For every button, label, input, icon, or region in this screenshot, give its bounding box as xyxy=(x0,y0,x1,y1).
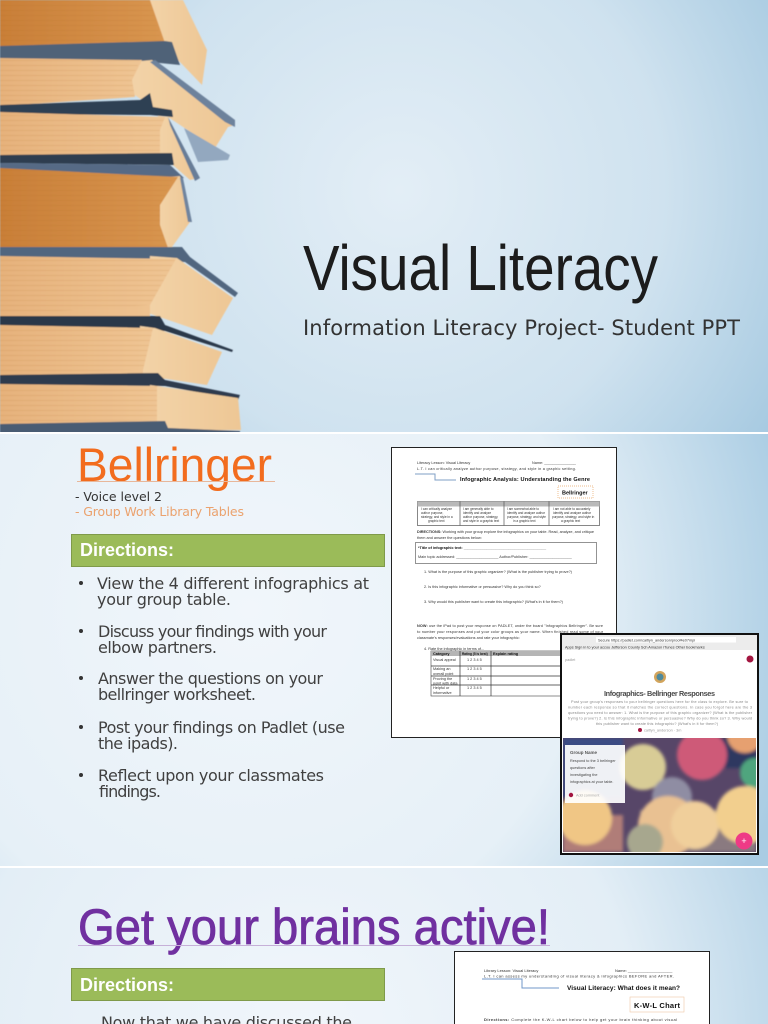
worksheet: infographic analysis: 1 2 3 4 5 xyxy=(467,658,482,662)
padlet note card: Add comment xyxy=(576,794,600,798)
image: stack of books xyxy=(0,0,241,433)
worksheet: infographic analysis xyxy=(392,448,616,738)
worksheet: infographic analysis: point with data xyxy=(433,682,458,686)
worksheet: infographic analysis: 1. What is the purpose of this graphic organizer? (What is the publisher trying to prove?) xyxy=(424,570,573,574)
subtitle: Information Literacy Project- Student PPT xyxy=(303,316,740,340)
worksheet: infographic analysis: purpose, strategy, and style xyxy=(507,515,546,519)
directions bar xyxy=(72,968,384,1000)
padlet description: questions you need to answer: 1. What is the purpose of this graphic organizer? (What is the publisher xyxy=(568,711,753,715)
directions bar xyxy=(72,534,384,566)
padlet note card: infographics at your table. xyxy=(570,780,613,784)
worksheet: infographic analysis: identify and analyze author xyxy=(553,511,592,515)
worksheet: infographic analysis: identify and analyze author xyxy=(507,511,546,515)
worksheet: infographic analysis: informative xyxy=(433,691,452,695)
worksheet: infographic analysis: NOW: use the iPad to post your response on PADLET, under the board "Infographics Bellringer". Be sure xyxy=(417,624,603,628)
worksheet: K-W-L chart: Library Lesson: Visual Literacy xyxy=(484,968,538,973)
list: directions bullets: Discuss your findings with your xyxy=(98,622,327,641)
worksheet: infographic analysis: L.T. I can critically analyze author purpose, strategy, and style in a graphic setting. xyxy=(417,467,576,471)
worksheet: infographic analysis: I am not able to accurately xyxy=(553,507,591,511)
title: Visual Literacy xyxy=(303,232,658,304)
list: directions bullets: your group table. xyxy=(97,590,231,609)
worksheet: infographic analysis: I am generally able to xyxy=(463,507,494,511)
worksheet: infographic analysis: Explain rating xyxy=(493,652,519,656)
padlet heading: Infographics- Bellringer Responses xyxy=(604,689,715,698)
screenshot: padlet board xyxy=(558,634,768,860)
padlet note card: questions after xyxy=(570,766,596,770)
directions bar: Directions: xyxy=(80,975,174,995)
worksheet: infographic analysis: 1 2 3 4 5 xyxy=(467,677,482,681)
list: directions bullets: View the 4 different infographics at xyxy=(97,574,369,593)
heading: Bellringer: Bellringer xyxy=(77,438,272,491)
worksheet: infographic analysis: in a graphic text xyxy=(513,519,536,523)
worksheet: infographic analysis: graphic text xyxy=(428,519,445,523)
worksheet: infographic analysis: Category xyxy=(433,652,450,656)
list: directions bullets: the ipads). xyxy=(98,734,178,753)
padlet note card xyxy=(565,745,625,803)
list: directions bullets: Post your findings on Padlet (use xyxy=(98,718,345,737)
padlet description: number each response so that it matches the correct questions. In case you forgot here are the 3 xyxy=(568,706,752,710)
add button: + xyxy=(741,836,747,846)
worksheet: infographic analysis: Literacy Lesson: Visual Literacy xyxy=(417,461,470,465)
padlet note card: Respond to the 3 bellringer xyxy=(570,759,616,763)
worksheet: infographic analysis: them and answer the questions below: xyxy=(417,536,482,540)
worksheet: infographic analysis: I am somewhat able to xyxy=(507,507,539,511)
worksheet: infographic analysis: *Title of infographic text: _______________________________________ xyxy=(418,546,547,550)
worksheet: infographic analysis: Proving the xyxy=(433,677,452,681)
worksheet: K-W-L chart: Directions: Complete the K-W-L chart below to help get your brain thinking about visual xyxy=(484,1017,677,1022)
padlet description: trying to prove?) 2. Is this infographic informative or persuasive? Why do you think so? 3. Why would xyxy=(568,716,752,720)
worksheet: infographic analysis: classmate's responses/evaluations and rate your infographic: xyxy=(417,636,520,640)
worksheet: infographic analysis: overall point xyxy=(433,672,454,676)
worksheet: K-W-L chart: K-W-L Chart xyxy=(634,1001,680,1010)
padlet description: this publisher want to create this infographic? (What's in it for them?) xyxy=(596,722,719,726)
directions bar: Directions: xyxy=(80,540,174,560)
slide 2: bellringer xyxy=(0,434,768,866)
browser chrome: Apps Sign in to your accou Jefferson County Sch Amazon iTunes Other bookmarks xyxy=(565,646,705,650)
padlet description xyxy=(568,700,753,732)
worksheet: infographic analysis: DIRECTIONS: Working with your group explore the infographics on your table. Read, analyze, and critique xyxy=(417,530,594,534)
slide 1: title xyxy=(0,0,768,433)
worksheet: infographic analysis: identify and analyze xyxy=(463,511,491,515)
padlet description: Post your group's responses to your bellringer questions here for the class to explore. Be sure to xyxy=(571,700,748,704)
padlet description: caitlyn_anderson · 3m xyxy=(644,728,681,732)
worksheet: infographic analysis: purpose, strategy, and style in xyxy=(552,515,595,519)
padlet note card: Group Name xyxy=(570,750,598,755)
worksheet: infographic analysis: 4. Rate the infographic in terms of... xyxy=(424,647,484,651)
worksheet: K-W-L chart xyxy=(454,952,710,1024)
worksheet: infographic analysis: Rating (5 is best) xyxy=(462,652,488,656)
worksheet: K-W-L chart: Visual Literacy: What does it mean? xyxy=(567,985,680,992)
browser chrome: Secure https://padlet.com/caitlyn_anderson/proof4e07mpi xyxy=(598,638,695,642)
list: directions bullets: Answer the questions on your xyxy=(98,669,323,688)
list: directions bullets: elbow partners. xyxy=(98,638,217,657)
worksheet: K-W-L chart: L.T. I can assess my understanding of visual literacy & infographics BEFORE and AFTER. xyxy=(484,974,674,978)
worksheet: infographic analysis: author purpose, strategy, xyxy=(463,515,498,519)
worksheet: infographic analysis: Helpful or xyxy=(433,686,450,690)
list: directions bullets: findings. xyxy=(99,782,161,801)
worksheet: infographic analysis: Infographic Analysis: Understanding the Genre xyxy=(460,477,590,483)
worksheet: infographic analysis: Visual appeal xyxy=(433,658,456,662)
list: directions bullets: Reflect upon your classmates xyxy=(98,766,324,785)
worksheet: infographic analysis: to number your responses and put your color groups as your name. When finished read some of your xyxy=(417,630,604,634)
worksheet: infographic analysis: and style in a graphic text xyxy=(463,519,499,523)
worksheet: infographic analysis: 3. Why would this publisher want to create this infographic? (What's in it for them?) xyxy=(424,600,564,604)
worksheet: K-W-L chart: Name: ____________________ xyxy=(615,968,673,973)
worksheet: infographic analysis: 2. Is this infographic informative or persuasive? Why do you think so? xyxy=(424,585,541,589)
slide 3: get your brains active xyxy=(0,868,768,1024)
text: group work location: - Group Work Library Tables xyxy=(75,504,244,519)
bokeh photo xyxy=(563,738,756,852)
worksheet: infographic analysis: Making an xyxy=(433,667,451,671)
worksheet: infographic analysis: Bellringer xyxy=(562,490,589,496)
worksheet: infographic analysis: Main topic addressed: ____________________ Author/Publisher: ____________________ xyxy=(418,555,573,559)
worksheet: infographic analysis: a graphic text xyxy=(561,519,580,523)
browser chrome: padlet xyxy=(565,658,576,662)
text: voice level: - Voice level 2 xyxy=(75,489,162,504)
add button xyxy=(736,832,752,850)
worksheet: infographic analysis: author purpose, xyxy=(421,511,443,515)
padlet note card: investigating the xyxy=(570,773,597,777)
worksheet: infographic analysis: 1 2 3 4 5 xyxy=(467,667,482,671)
worksheet: infographic analysis: I can critically analyze xyxy=(421,507,452,511)
list: directions bullets xyxy=(79,574,369,801)
worksheet: infographic analysis: 1 2 3 4 5 xyxy=(467,686,482,690)
list: directions bullets: bellringer worksheet. xyxy=(98,685,256,704)
browser chrome xyxy=(562,635,757,683)
worksheet: infographic analysis: strategy, and style in a xyxy=(421,515,453,519)
worksheet: infographic analysis: Name: _______________ xyxy=(532,461,577,465)
heading: Get your brains active!: Get your brains active! xyxy=(78,899,550,955)
